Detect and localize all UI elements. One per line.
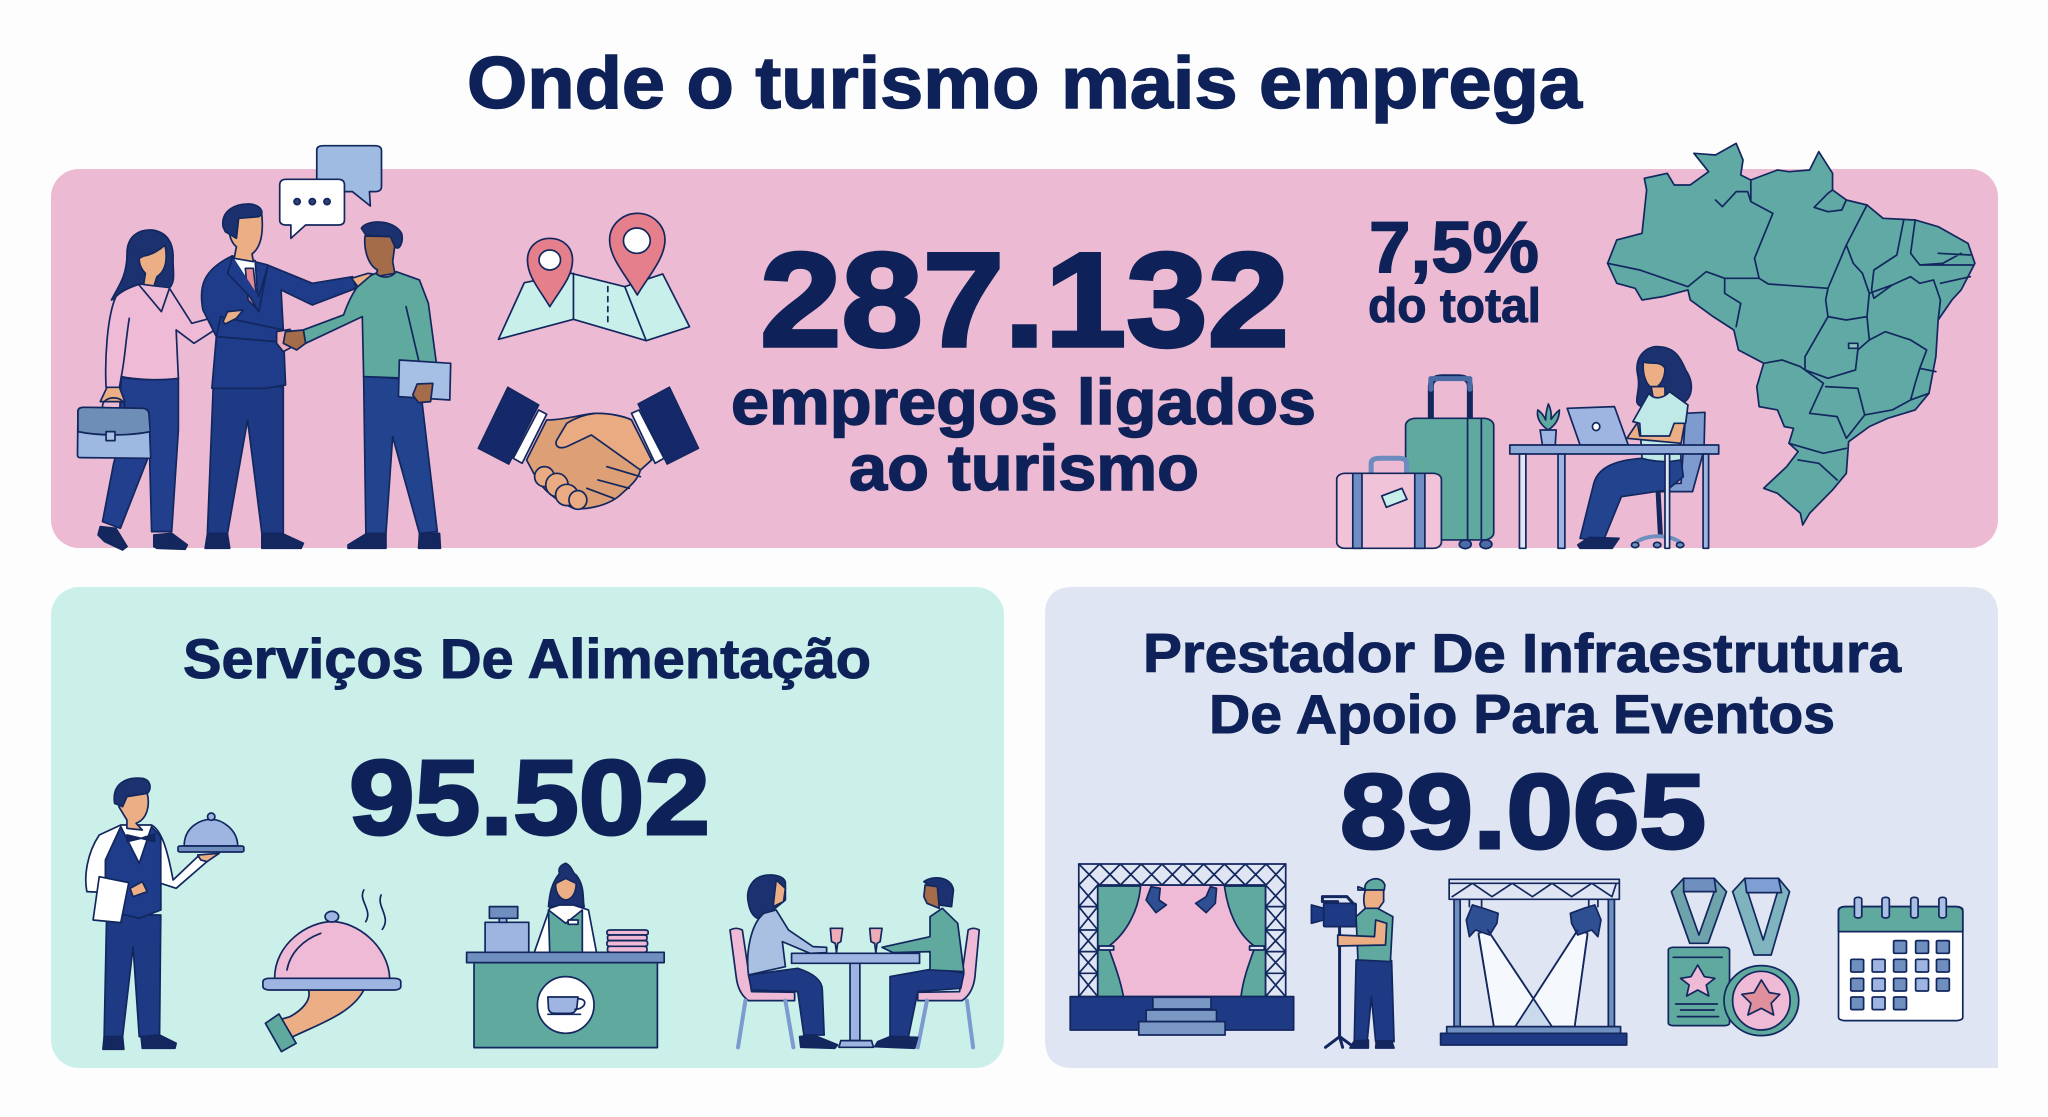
panel: total tourism jobs [51,143,1998,550]
title: Onde o turismo mais emprega [467,43,1583,124]
illustration: three people shaking hands [77,146,451,550]
illustration: stage with truss and curtains [1070,864,1294,1035]
icon: badge and medal [1668,878,1799,1036]
label: of total: do total [1368,280,1541,333]
map of Brazil [1608,143,1975,525]
illustration: waiter with cloche [86,778,244,1049]
man in green sweater [364,376,437,533]
panel background: pink [51,169,1998,548]
panel background: lavender [1045,587,1998,1068]
panel: event support infrastructure [1045,587,1998,1068]
icon: handshake [478,387,698,509]
statistic: event support jobs: 89.065 [1340,753,1706,871]
label: jobs linked to tourism line 1: empregos ligados [731,366,1316,438]
man in suit [207,387,283,533]
illustration: lighting rig [1441,879,1627,1045]
illustration: cashier at counter [467,863,664,1048]
statistic: total jobs: 287.132 [760,226,1289,375]
icon: map with location pins [498,213,690,341]
illustration: woman working at laptop [1510,347,1719,548]
heading: event support line 2: De Apoio Para Eventos [1209,683,1835,745]
label: jobs linked to tourism line 2: ao turismo [849,432,1199,504]
woman [111,230,174,300]
icon: hand holding cloche [263,890,401,1052]
statistic: food services jobs: 95.502 [349,739,710,857]
statistic: share of total: 7,5% [1369,208,1539,288]
heading: food services: Serviços De Alimentação [183,627,871,690]
panel: food services [51,587,1004,1068]
panel background: mint [51,587,1004,1068]
icon: calendar [1839,897,1963,1021]
illustration: luggage [1337,377,1494,549]
illustration: diners at table [730,875,979,1048]
heading: event support line 1: Prestador De Infraestrutura [1143,622,1901,684]
illustration: camera operator [1311,879,1394,1048]
